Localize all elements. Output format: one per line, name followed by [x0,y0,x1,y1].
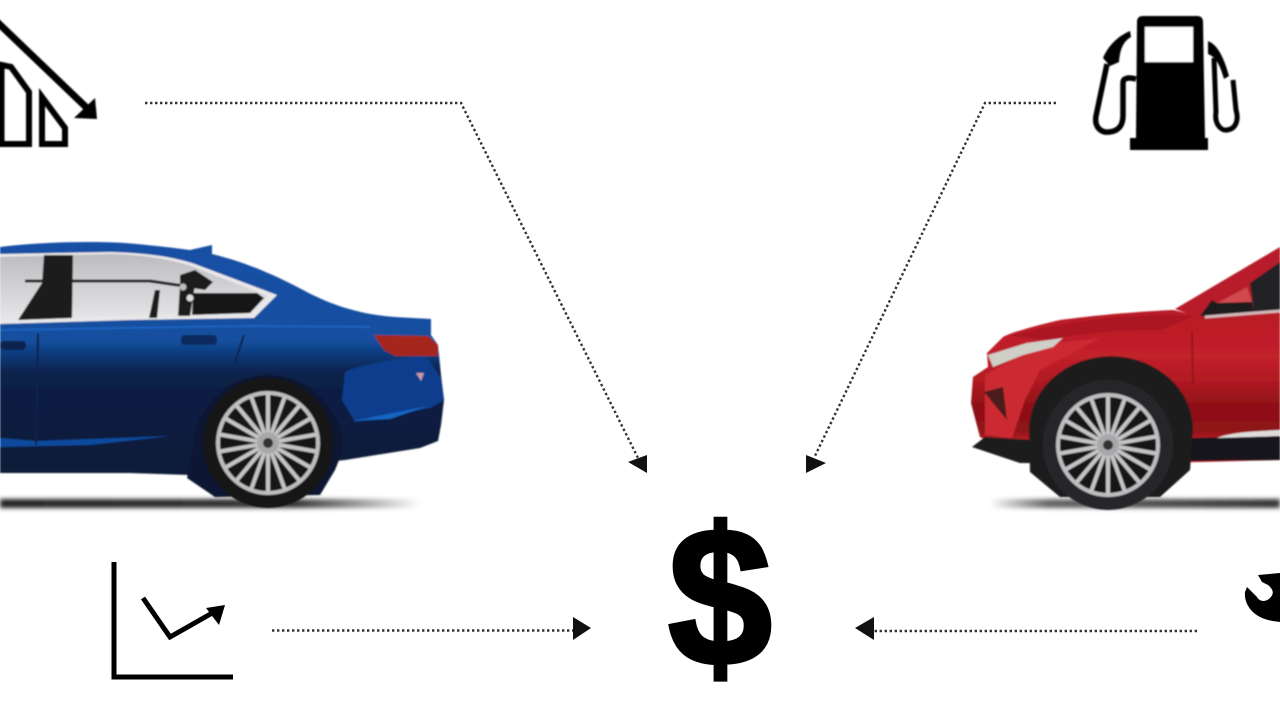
blue car rear quarter panel [342,355,444,422]
red car front wheel tyre [1043,380,1173,510]
red car headlight [988,338,1063,367]
chart trend line [143,598,214,637]
right hose [1214,58,1237,130]
blue sedan car [0,242,444,508]
red car mirror [1200,287,1254,316]
right nozzle [1208,41,1229,79]
red car chrome sill [1217,430,1280,438]
chart arrowhead [206,605,225,625]
red car chrome belt line [1205,311,1280,317]
blue car body [0,242,444,475]
blue car belt line [0,326,370,330]
red car lower grille [984,387,1007,420]
blue car tail light [374,335,438,356]
small bar [42,97,65,144]
red car window [1250,262,1280,313]
blue car mirror detail [180,270,213,302]
central dollar sign: $ [668,487,772,707]
blue car rear wheel arch [187,375,343,497]
blue car door seams [36,333,244,445]
chart axes [114,562,233,677]
icon: fuel pump [1096,16,1237,150]
ground shadow under red car [990,499,1280,508]
red car wheel arch [1029,356,1193,497]
blue car rear quarter glass [192,293,264,315]
pump body [1130,16,1208,150]
arrow: top left to dollar [145,103,647,473]
icon: resale line chart [114,562,233,677]
arrow: bottom right to dollar [855,617,1197,640]
blue car rear wheel rim [218,393,318,493]
blue car window glass [0,254,268,320]
red car body [971,310,1280,465]
arrow: bottom left to dollar [272,617,591,640]
red car door seam [1192,332,1193,385]
red SUV car [971,247,1280,510]
arrow: top right to dollar [806,103,1056,473]
door handle rear [181,335,217,345]
blue car rear bumper highlight [353,406,428,421]
left nozzle [1103,31,1131,66]
icon: declining value bars and arrow [0,20,97,144]
red car front fender highlight [985,338,1100,438]
blue car badge [416,373,424,381]
blue car window trim [0,252,277,324]
pump display [1145,27,1193,62]
red car hood top shade [1010,315,1195,340]
down-trend arrow line [0,20,88,109]
blue car rear wheel tyre [203,378,333,508]
door handle front [0,341,26,350]
down-trend arrowhead [74,98,97,119]
red car roof and pillar [1175,247,1280,318]
red car front wheel rim [1058,395,1158,495]
icon: wrench [1245,573,1280,622]
red car front lip [972,437,1035,463]
red car rocker panel [1190,436,1280,461]
blue car side highlight [0,436,170,447]
red car mirror cap [1217,287,1252,303]
ground shadow under blue car [0,499,420,508]
blue car window frame line [25,281,195,287]
blue car pillar [18,255,73,320]
tall bar [0,65,29,144]
left hose [1096,64,1136,132]
blue car rear pillar [149,285,195,318]
